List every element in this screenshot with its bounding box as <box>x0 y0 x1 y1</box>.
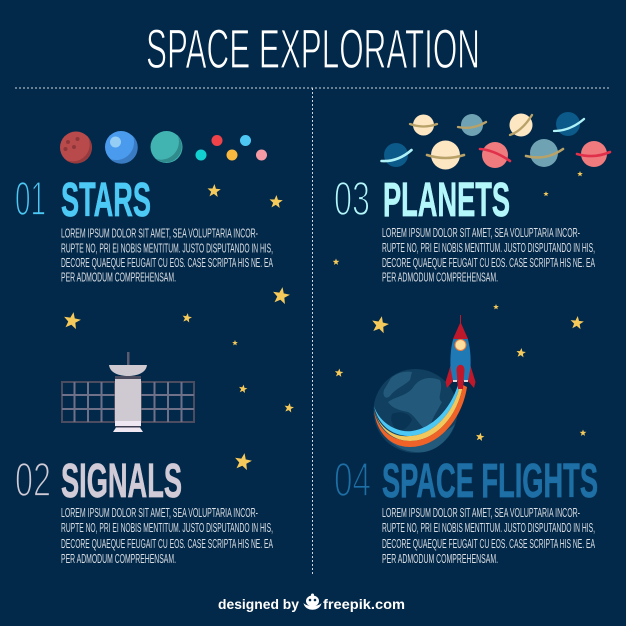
section 01: stars <box>15 173 273 285</box>
footer credit <box>218 594 405 612</box>
body text <box>382 225 595 285</box>
credit text right: freepik.com <box>323 596 405 612</box>
icon: satellite <box>62 352 194 432</box>
antenna and dish <box>109 352 147 379</box>
satellite base <box>113 421 143 432</box>
rocket exhaust trails <box>374 385 467 447</box>
number 04: 04 <box>334 454 371 507</box>
icon: globe and rocket <box>374 315 476 453</box>
number 02: 02 <box>15 454 51 507</box>
icon: freepik logo <box>304 594 322 610</box>
heading: stars: STARS <box>61 174 151 227</box>
body text: PER ADMODUM COMPREHENSAM. <box>61 270 176 285</box>
section 03: planets <box>334 173 595 285</box>
number 01: 01 <box>15 173 46 226</box>
body text <box>61 505 273 566</box>
number 03: 03 <box>334 173 370 226</box>
solar panel right <box>141 382 194 422</box>
heading: planets: PLANETS <box>383 174 510 227</box>
body text: PER ADMODUM COMPREHENSAM. <box>61 551 176 566</box>
body text: DECORE QUAEQUE FEUGAIT CU EOS. CASE SCRIPTA HIS NE. EA <box>61 255 273 270</box>
globe <box>374 369 458 453</box>
satellite body <box>115 379 141 425</box>
decorative stars <box>62 171 586 471</box>
body text: LOREM IPSUM DOLOR SIT AMET, SEA VOLUPTARIA INCOR- <box>61 226 258 241</box>
icon: red planet <box>60 132 92 164</box>
icon: blue planet <box>105 131 138 164</box>
icon: coloured dots <box>196 135 267 160</box>
rocket <box>446 315 476 389</box>
body text: RUPTE NO, PRI EI NOBIS MENTITUM. JUSTO DISPUTANDO IN HIS, <box>61 240 273 255</box>
heading: signals: SIGNALS <box>61 455 182 508</box>
body text: LOREM IPSUM DOLOR SIT AMET, SEA VOLUPTARIA INCOR- <box>61 505 258 520</box>
solar panel left <box>62 382 115 422</box>
icon: ringed planets <box>382 112 610 170</box>
body text <box>61 226 273 285</box>
planet row one <box>410 112 584 136</box>
credit text left: designed by <box>218 596 299 612</box>
body text: PER ADMODUM COMPREHENSAM. <box>382 270 498 285</box>
body text <box>382 505 595 566</box>
icon: three planets and dots <box>60 131 267 164</box>
planet row two <box>382 139 610 170</box>
section 04: space flights <box>334 454 598 566</box>
section 02: signals <box>15 454 273 566</box>
body text: DECORE QUAEQUE FEUGAIT CU EOS. CASE SCRIPTA HIS NE. EA <box>61 536 273 551</box>
body text: PER ADMODUM COMPREHENSAM. <box>382 551 498 566</box>
icon: teal planet <box>150 131 182 163</box>
body text: RUPTE NO, PRI EI NOBIS MENTITUM. JUSTO DISPUTANDO IN HIS, <box>61 520 273 535</box>
